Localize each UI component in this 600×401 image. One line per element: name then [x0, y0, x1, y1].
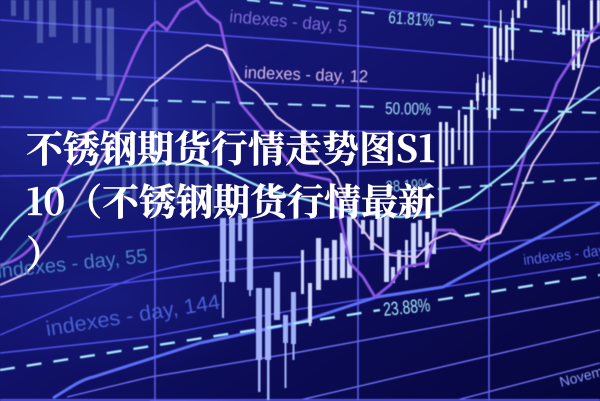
- label: 61.81%: 61.81%: [388, 8, 435, 30]
- title: 不锈钢期货行情走势图S1: [26, 119, 435, 173]
- label: indexes day 55: indexes - day, 55: [0, 245, 149, 283]
- cyan curves: [0, 87, 600, 268]
- dashed fibonacci level 50.00%: [0, 96, 600, 113]
- label: 38.19%: 38.19%: [385, 177, 430, 196]
- title: [26, 119, 435, 278]
- candlesticks centre: [220, 215, 296, 400]
- title: 10（不锈钢期货行情最新: [26, 172, 435, 226]
- candlesticks right: [439, 0, 600, 217]
- thick trend curve: [53, 203, 600, 398]
- purple moving average curve: [0, 0, 600, 297]
- label: 23.88%: 23.88%: [382, 295, 431, 321]
- pink moving average curve: [0, 37, 600, 285]
- label: indexes day 12: indexes - day, 12: [244, 63, 368, 86]
- label: indexes day 144: indexes - day, 144: [44, 291, 222, 341]
- faint candlesticks upper left: [11, 0, 215, 217]
- dashed fibonacci level 61.81%: [247, 0, 600, 37]
- dashed fibonacci level 23.88%: [0, 275, 600, 370]
- title: ）: [26, 224, 63, 278]
- dashed fibonacci level 38.19%: [438, 178, 600, 189]
- label: indexes day 5: indexes - day, 5: [229, 6, 348, 36]
- label: 50.00%: 50.00%: [385, 99, 431, 119]
- candlesticks lower middle: [301, 217, 436, 326]
